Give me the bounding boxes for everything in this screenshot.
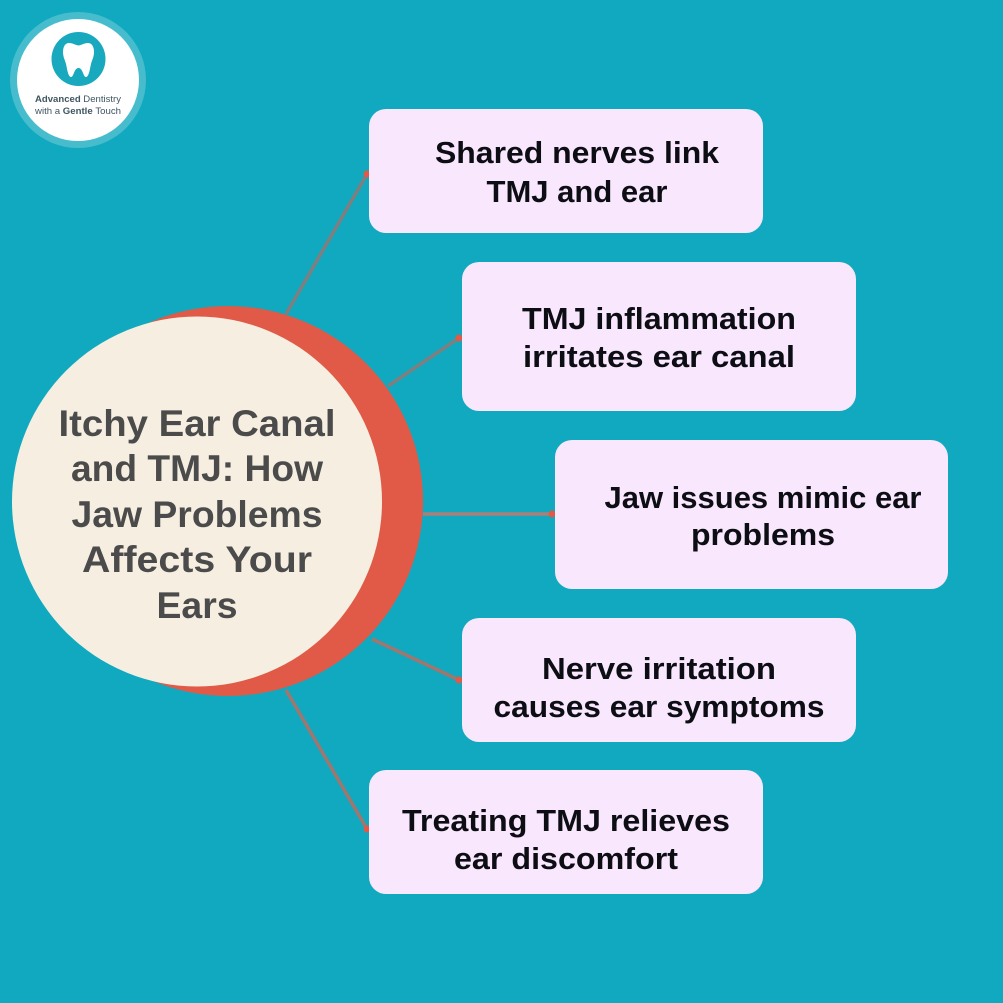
panel: nerve irritation [462, 618, 856, 742]
text: mimic: problems [691, 517, 835, 552]
text: nerve irritation: causes ear symptoms [494, 689, 824, 724]
cream central circle [12, 316, 382, 686]
text: shared nerves: Shared nerves link [435, 135, 720, 170]
logo text: Advanced Dentistry [35, 94, 121, 105]
icon: tooth [63, 43, 94, 77]
logo text [34, 94, 121, 117]
title: and TMJ: How [71, 448, 323, 489]
connector: treating [286, 690, 370, 832]
connector: nerve irritation [372, 639, 462, 684]
text: shared nerves [435, 135, 720, 209]
title: Ears [156, 585, 238, 626]
text: nerve irritation: Nerve irritation [542, 651, 776, 686]
panel: shared nerves [369, 109, 763, 233]
panel: treating [369, 770, 763, 894]
connector: inflammation [388, 334, 462, 386]
title [58, 403, 336, 626]
text: treating: ear discomfort [454, 841, 678, 876]
text: inflammation: TMJ inflammation [522, 301, 796, 336]
text: mimic: Jaw issues mimic ear [604, 480, 922, 515]
panel: mimic [555, 440, 948, 589]
text: inflammation: irritates ear canal [523, 339, 795, 374]
connector: mimic [423, 510, 556, 518]
connector: shared nerves [286, 170, 370, 314]
text: mimic [604, 480, 922, 552]
title: Jaw Problems [72, 494, 322, 535]
panel: inflammation [462, 262, 856, 411]
title: Affects Your [82, 539, 312, 580]
text: inflammation [522, 301, 796, 374]
title: Itchy Ear Canal [58, 403, 336, 444]
text: shared nerves: TMJ and ear [486, 174, 668, 209]
text: treating: Treating TMJ relieves [402, 803, 730, 838]
text: treating [402, 803, 730, 876]
logo badge [10, 12, 146, 148]
text: nerve irritation [494, 651, 824, 724]
logo text: with a Gentle Touch [34, 106, 121, 117]
red backing circle [33, 306, 423, 696]
